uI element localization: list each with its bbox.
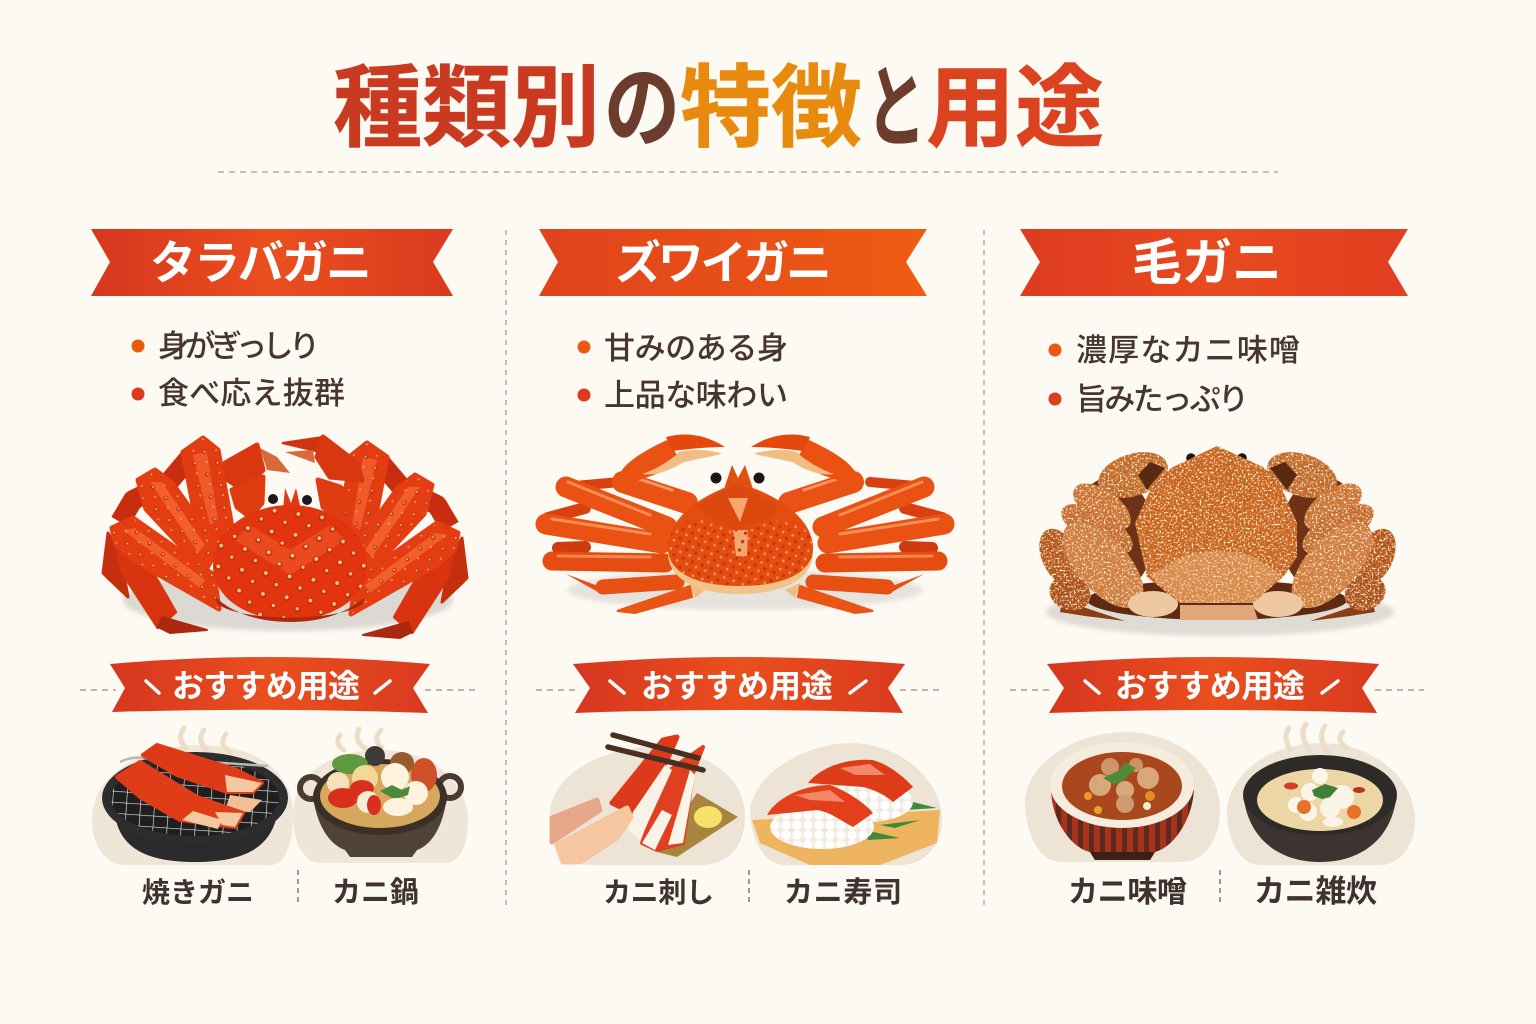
banner: 毛ガニ: 毛ガニ [1132,235,1282,291]
features: ズワイガニ [578,331,788,413]
banner: ズワイガニ: ズワイガニ [615,237,832,289]
food: カニ味噌 [1025,732,1220,862]
banner: ズワイガニ [539,229,927,296]
title: 特徴 [680,59,862,159]
features: ズワイガニ: 甘みのある身 [604,331,788,366]
sub-banner: おすすめ用途 [1010,657,1424,713]
icon: steam [338,729,382,750]
panel: ズワイガニ [536,229,944,909]
features: タラバガニ [132,329,345,411]
sub-banner: おすすめ用途 [80,657,475,713]
food: カニ鍋 [293,729,468,863]
banner: 毛ガニ [1020,229,1408,296]
banner: タラバガニ: タラバガニ [150,237,372,289]
food: カニ寿司 [750,743,942,865]
label: カニ刺し: カニ刺し [603,877,714,908]
sub-banner: おすすめ用途 [536,657,944,713]
banner: タラバガニ [91,229,453,296]
features: 毛ガニ: 濃厚なカニ味噌 [1076,333,1300,368]
label: カニ鍋: カニ鍋 [332,876,419,909]
features: タラバガニ: 食べ応え抜群 [158,376,345,411]
title: 用途 [926,59,1104,159]
label: 焼きガニ: 焼きガニ [142,877,254,908]
icon: steam [180,728,230,752]
panel: 毛ガニ [1010,229,1424,909]
label: カニ味噌: カニ味噌 [1068,876,1187,909]
features: 毛ガニ: 旨みたっぷり [1076,382,1249,417]
sub-banner: おすすめ用途: おすすめ用途 [641,668,833,704]
illustration: hairy crab [1031,444,1404,636]
features: ズワイガニ: 上品な味わい [604,378,788,413]
food: 焼きガニ [92,728,293,865]
title: の [604,59,680,159]
title [333,59,1104,159]
features: タラバガニ: 身がぎっしり [158,329,320,364]
title: 種類別 [333,59,600,159]
sub-banner: おすすめ用途: おすすめ用途 [1115,668,1305,704]
label: カニ寿司: カニ寿司 [784,876,902,909]
label: カニ雑炊: カニ雑炊 [1254,874,1377,909]
food: カニ刺し [550,735,745,865]
features: 毛ガニ [1048,333,1300,417]
illustration: king crab [103,437,467,638]
food: カニ雑炊 [1227,724,1415,865]
icon: steam [1286,724,1347,752]
title: と [866,59,926,159]
panel: タラバガニ [80,229,1220,909]
sub-banner: おすすめ用途: おすすめ用途 [172,668,360,704]
illustration: snow crab [546,434,944,613]
